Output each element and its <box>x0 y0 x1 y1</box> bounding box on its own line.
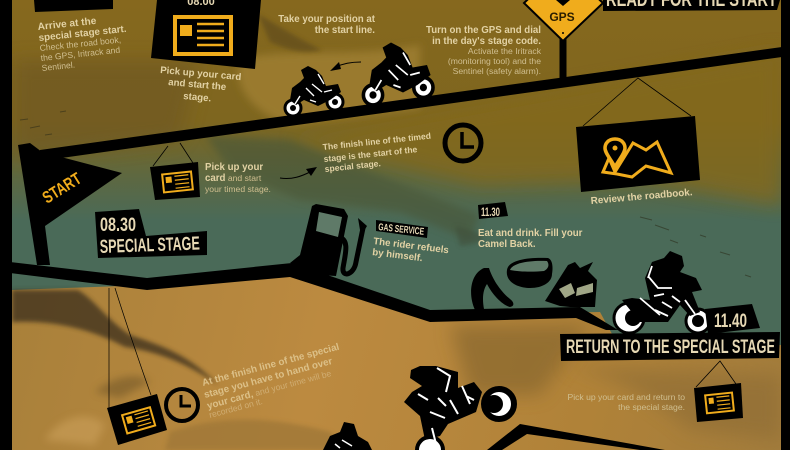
caption: start line: the start line. <box>315 25 375 36</box>
icon: clock <box>445 125 481 161</box>
right border <box>781 0 790 450</box>
step: finish line of timed stage: special stage. <box>324 158 381 174</box>
icon: fuel pump <box>290 204 367 276</box>
step: finish line of special stage: your card, and your time will be <box>206 368 333 412</box>
step: GPS text: (monitoring tool) and the <box>448 56 541 66</box>
panel: finish card <box>107 288 167 445</box>
step: finish line of timed stage: The finish line of the timed <box>322 131 431 152</box>
caption: start line <box>278 14 376 36</box>
step: rider refuels: by himself. <box>372 247 424 264</box>
road: middle <box>10 262 618 330</box>
step: pick up card timed: your timed stage. <box>205 184 271 194</box>
label: 11.30: 11.30 <box>481 205 500 219</box>
caption: pick up your card: and start the <box>168 77 227 93</box>
step: finish line of special stage <box>201 342 341 420</box>
icon: bottles <box>545 262 597 307</box>
left border <box>0 0 12 450</box>
heading: 08.30 special stage: SPECIAL STAGE <box>99 234 200 258</box>
step: return to stage: the special stage. <box>618 402 685 412</box>
arrow: to timed stage <box>280 167 317 179</box>
label: gas service <box>376 220 428 238</box>
icon: banana <box>471 268 513 310</box>
step: pick up card timed: Pick up your <box>205 162 263 173</box>
step: GPS text: Turn on the GPS and dial <box>426 25 541 36</box>
bike: jumping <box>404 366 514 450</box>
step: arrive at start: Check the road book, <box>39 35 121 53</box>
arrow: to start line <box>330 62 361 71</box>
icon: GPS sign: GPS <box>549 10 575 24</box>
caption: pick up your card: stage. <box>183 91 212 104</box>
step: finish line of special stage: recorded on it. <box>208 396 264 420</box>
panel: roadbook sign <box>576 78 700 192</box>
icon: GPS sign <box>524 0 603 80</box>
step: arrive at start: special stage start. <box>38 24 127 44</box>
heading: 08.30 special stage: 08.30 <box>100 215 136 236</box>
flag: start: START <box>39 169 85 207</box>
step: finish line of timed stage <box>322 131 431 174</box>
step: finish line of special stage: At the finish line of the special <box>201 342 341 389</box>
caption: start line: Take your position at <box>278 14 376 25</box>
heading: return to the special stage <box>560 332 780 361</box>
step: arrive at start: Arrive at the <box>37 16 97 33</box>
step: GPS text: in the day's stage code. <box>432 36 541 47</box>
panel: start card <box>151 0 261 69</box>
heading: 08.30 special stage <box>95 209 207 258</box>
step: finish line of timed stage: stage is the start of the <box>323 144 418 164</box>
step: GPS text: Sentinel (safety alarm). <box>453 66 541 76</box>
step: finish line of special stage: stage you have to hand over <box>203 356 334 401</box>
caption: review the roadbook: Review the roadbook. <box>590 187 693 207</box>
step: arrive at start <box>37 16 127 73</box>
step: rider refuels: The rider refuels <box>373 236 449 256</box>
panel: hanging card <box>150 143 200 200</box>
step: arrive at start: Sentinel. <box>41 60 75 73</box>
step: arrive at start: the GPS, Iritrack and <box>40 45 121 63</box>
step: eat and drink: Camel Back. <box>478 239 536 250</box>
label: 11.40: 11.40 <box>714 311 747 332</box>
bike: small waiting <box>285 66 343 116</box>
label: 11.30 <box>478 202 508 219</box>
step: eat and drink <box>478 228 583 250</box>
bike: big rider on road <box>614 251 710 333</box>
road: lower <box>487 424 665 450</box>
step: eat and drink: Eat and drink. Fill your <box>478 228 583 239</box>
caption: pick up your card: Pick up your card <box>160 65 242 83</box>
label: 11.40 <box>705 304 760 334</box>
bike: small at bottom <box>323 422 372 450</box>
icon: sandwich <box>507 258 553 288</box>
road: upper <box>40 47 782 161</box>
step: pick up card timed <box>205 162 271 194</box>
step: pick up card timed: card and start <box>205 173 262 184</box>
label: gas service: GAS SERVICE <box>378 222 425 238</box>
step: return to stage: Pick up your card and return to <box>567 392 685 402</box>
bike: large waiting <box>363 42 433 105</box>
flag: start <box>18 143 122 265</box>
step: GPS text: Activate the Iritrack <box>468 46 542 56</box>
panel: top left box <box>34 0 113 12</box>
step: GPS text <box>426 25 542 76</box>
panel: return card <box>694 361 743 422</box>
icon: finish clock <box>166 389 198 421</box>
caption: pick up your card <box>160 65 242 104</box>
step: return to stage <box>567 392 685 412</box>
